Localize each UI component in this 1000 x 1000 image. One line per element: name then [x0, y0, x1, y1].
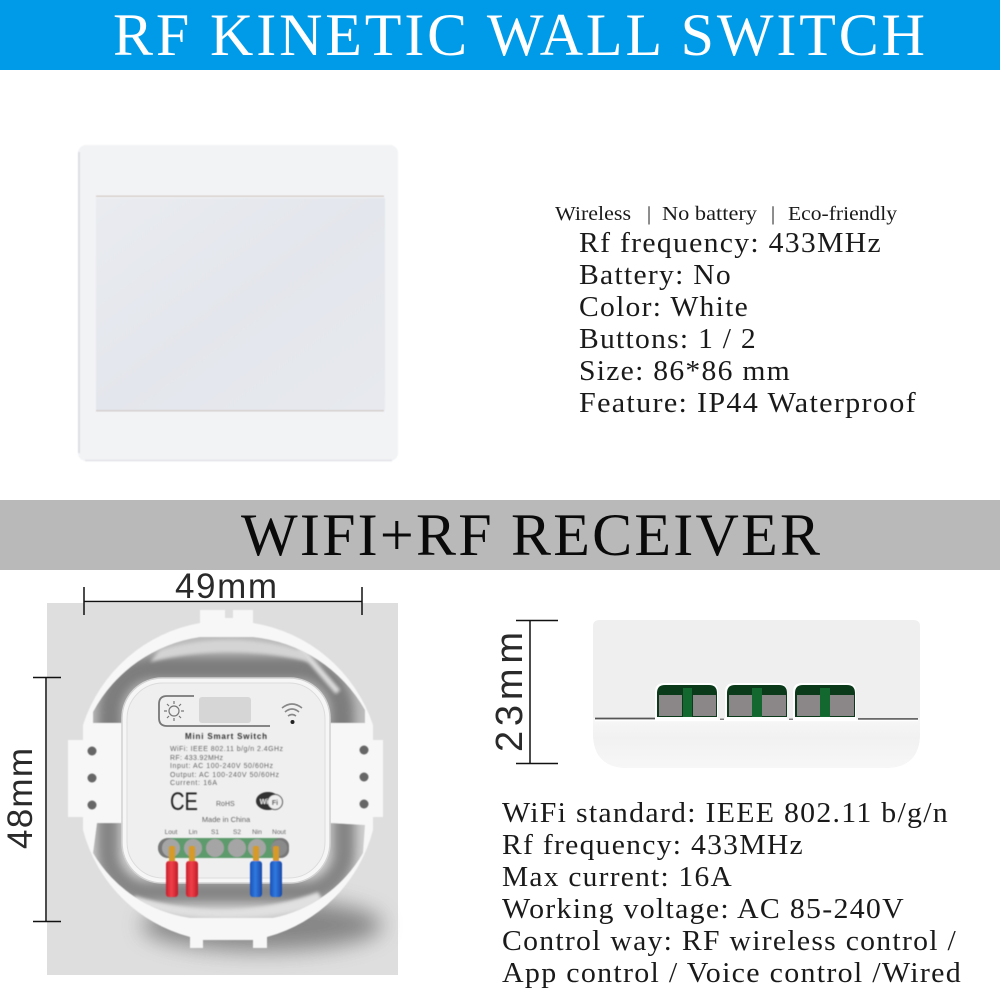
- terminal strip: [158, 838, 289, 858]
- module label: Current: 16A: [170, 780, 217, 787]
- tagline: |: [771, 203, 775, 225]
- module label: WiFi: IEEE 802.11 b/g/n 2.4GHz: [170, 746, 284, 753]
- module label: RoHS: [216, 801, 235, 808]
- receiver specifications: Rf frequency: 433MHz: [502, 830, 804, 861]
- module label: CE: [170, 788, 198, 816]
- receiver specifications: Control way: RF wireless control /: [502, 926, 957, 957]
- module label: Lout: [165, 829, 178, 836]
- switch specifications: Rf frequency: 433MHz: [579, 228, 882, 259]
- module label: Nin: [252, 829, 262, 836]
- dimension: 23mm height: [489, 620, 558, 764]
- indicator bracket: [159, 696, 270, 726]
- icon: wifi logo: Fi: [272, 800, 278, 807]
- terminal slots: [655, 683, 856, 720]
- photo: kinetic wall switch: [78, 145, 398, 461]
- dimension: 48mm height: [1, 677, 61, 922]
- switch specifications: Feature: IP44 Waterproof: [579, 388, 917, 419]
- receiver specifications: [502, 798, 962, 989]
- icon: wifi logo: [256, 792, 282, 810]
- mounting holes: [88, 746, 368, 810]
- receiver specifications: WiFi standard: IEEE 802.11 b/g/n: [502, 798, 949, 829]
- module label: S1: [211, 829, 219, 836]
- tagline: |: [647, 203, 651, 225]
- module label: Made in China: [202, 815, 251, 824]
- receiver specifications: App control / Voice control /Wired: [502, 958, 962, 989]
- module label: Lin: [189, 829, 198, 836]
- tagline: Wireless: [555, 203, 631, 225]
- slot 1: [655, 683, 718, 720]
- tagline: No battery: [662, 203, 757, 225]
- upper inner ring: [92, 636, 366, 724]
- module label: Nout: [272, 829, 286, 836]
- switch specifications: Size: 86*86 mm: [579, 356, 791, 387]
- tagline: Eco-friendly: [788, 203, 897, 225]
- module label: RF: 433.92MHz: [170, 755, 224, 762]
- receiver specifications: Max current: 16A: [502, 862, 733, 893]
- module label: Input: AC 100-240V 50/60Hz: [170, 763, 274, 770]
- receiver heading: WIFI+RF RECEIVER: [241, 502, 820, 568]
- display window: [199, 697, 251, 723]
- switch specifications: Color: White: [579, 292, 749, 323]
- switch specifications: Buttons: 1 / 2: [579, 324, 757, 355]
- module label: S2: [233, 829, 241, 836]
- dimension: 49mm width: [84, 567, 362, 615]
- photo: receiver side view: [593, 620, 920, 768]
- dimension: 49mm width: 49mm: [175, 567, 277, 606]
- wires: [166, 846, 282, 897]
- header banner: [0, 0, 1000, 70]
- module label: Mini Smart Switch: [185, 732, 267, 741]
- dimension: 48mm height: 48mm: [1, 748, 40, 849]
- rocker button: [96, 196, 385, 412]
- icon: wifi signal: [282, 704, 302, 724]
- module label: [165, 732, 286, 836]
- icon: wifi logo: Wi: [260, 799, 268, 806]
- lower inner ring: [92, 822, 366, 918]
- seam line: [595, 718, 918, 720]
- module label: Output: AC 100-240V 50/60Hz: [170, 772, 280, 779]
- slot 3: [793, 683, 856, 720]
- switch specifications: Battery: No: [579, 260, 732, 291]
- title: RF KINETIC WALL SWITCH: [113, 2, 925, 68]
- slot 2: [725, 683, 787, 720]
- icon: light bulb: [164, 701, 184, 721]
- receiver banner: [0, 500, 1000, 570]
- drop shadow: [142, 899, 382, 951]
- mounting bracket: [68, 610, 383, 948]
- receiver module: [122, 678, 330, 897]
- tagline: [555, 203, 897, 225]
- dimension: 23mm height: 23mm: [489, 632, 531, 752]
- switch specifications: [579, 228, 917, 419]
- receiver specifications: Working voltage: AC 85-240V: [502, 894, 905, 925]
- photo panel: receiver front: [47, 603, 398, 975]
